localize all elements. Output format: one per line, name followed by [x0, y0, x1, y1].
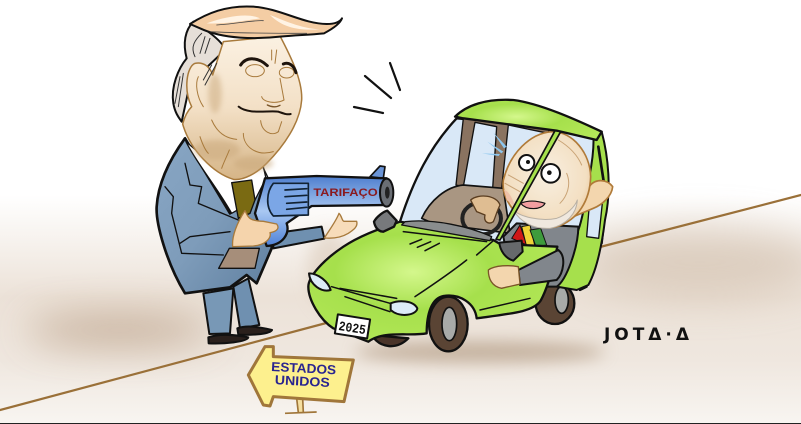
legs and shoes: [203, 278, 272, 343]
headlight right: [391, 301, 417, 315]
jacket: [157, 138, 273, 293]
front underbody: [372, 335, 408, 346]
inner mirror: [499, 241, 523, 261]
sign text: ESTADOS: [271, 359, 337, 377]
sign text: UNIDOS: [274, 372, 331, 390]
hand on gun: [233, 211, 278, 247]
left door mirror: [374, 211, 397, 232]
back hair: [173, 22, 225, 122]
steering wheel and hand: [462, 196, 501, 234]
roof: [455, 100, 602, 140]
car body: [308, 222, 557, 342]
face shading: [193, 73, 273, 171]
eyebrows, mouth: [239, 59, 296, 114]
sweat drops: [482, 133, 507, 156]
body lines: [332, 232, 530, 312]
gun label: TARIFAÇO: [313, 187, 378, 199]
sign text: [270, 359, 337, 390]
eye right: [541, 164, 560, 183]
tie: [232, 180, 255, 218]
license plate: 2025: [337, 320, 367, 339]
seat: [422, 185, 510, 233]
cabin interior and windows: [400, 118, 608, 247]
character: man with revolver: [157, 6, 393, 343]
rear wheel: [536, 276, 587, 324]
revolver: [255, 166, 393, 246]
driver head: [503, 132, 613, 228]
arm to open hand: [273, 213, 357, 248]
face: [183, 36, 302, 179]
license plate: [335, 314, 370, 340]
interior pillar: [456, 118, 550, 188]
face creases: [197, 50, 294, 168]
car with driver: [308, 100, 613, 351]
headlight left: [309, 273, 331, 291]
top hair: [175, 6, 342, 107]
windshield pillar: [496, 131, 561, 240]
shirt: [186, 142, 266, 213]
driver torso: [503, 223, 578, 287]
sign post: [285, 398, 317, 413]
rear pillar and rear body: [557, 132, 609, 290]
jacket lapel lines: [165, 163, 268, 255]
road line: [0, 195, 801, 410]
sign: Estados Unidos: [248, 347, 353, 413]
mouth: [521, 201, 545, 209]
driver arm: [488, 250, 563, 288]
wiper and dash: [402, 221, 492, 241]
eye left: [519, 155, 534, 170]
front wheel: [429, 297, 468, 351]
sign board: [248, 347, 353, 406]
impact lines: [354, 63, 400, 113]
signature: JOTΔ·Δ: [603, 325, 690, 345]
folder: [219, 248, 259, 268]
